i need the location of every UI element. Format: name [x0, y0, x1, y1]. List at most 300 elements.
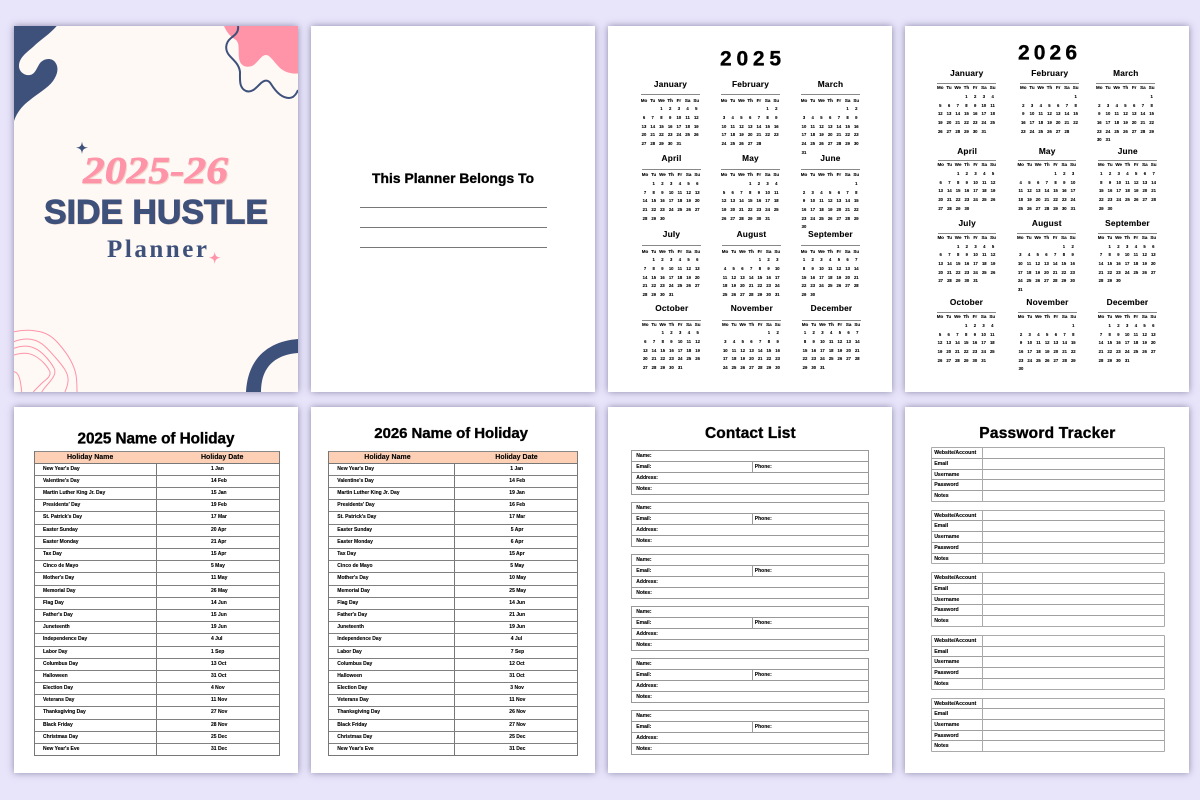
calendar: April 2025: 10 — [669, 190, 673, 195]
calendar: April 2026: Fr — [973, 162, 978, 167]
calendar: May 2026: Fr — [1053, 162, 1058, 167]
calendar: March 2025: 30 — [854, 141, 859, 146]
cover title: 2025-26: 2025-26 — [83, 151, 229, 193]
calendar: May 2026: 9 — [1063, 180, 1065, 185]
calendar: April 2026: 18 — [982, 188, 987, 193]
calendar: November 2026 — [1018, 297, 1077, 371]
calendar: June 2025: 13 — [837, 198, 841, 203]
table header: 2026: Holiday Name — [364, 454, 411, 461]
calendar: February 2026: 6 — [1057, 103, 1059, 108]
calendar: September 2026: 16 — [1116, 261, 1121, 266]
calendar: April 2026: 10 — [973, 180, 978, 185]
calendar: July 2026: 9 — [966, 252, 968, 257]
heading: 2026: 2026 — [1018, 42, 1077, 64]
calendar: May 2026: Th — [1044, 162, 1050, 167]
calendar: August 2026: 20 — [1044, 270, 1049, 275]
calendar: April 2026: 11 — [982, 180, 986, 185]
calendar: July 2025: 19 — [686, 275, 691, 280]
calendar: January 2026: 4 — [991, 94, 994, 99]
calendar: February 2025: 20 — [748, 132, 752, 137]
calendar: July 2025: We — [659, 249, 666, 254]
calendar: March 2025: 17 — [802, 132, 806, 137]
calendar: July 2026: 27 — [938, 278, 943, 283]
table: 2026 holidays: St. Patrick's Day — [337, 514, 376, 520]
calendar: March 2025: Su — [853, 98, 859, 103]
calendar: October 2026: 17 — [981, 340, 986, 345]
form: contact 4: Phone: — [755, 620, 772, 626]
calendar: January 2026: Sa — [981, 85, 987, 90]
calendar: September 2026: Sa — [1142, 235, 1147, 240]
calendar: September 2026: Th — [1124, 235, 1130, 240]
calendar: April 2026: 13 — [938, 188, 943, 193]
calendar: February 2026: 4 — [1040, 103, 1042, 108]
calendar: October 2025: 8 — [662, 339, 664, 344]
calendar: February 2026: 12 — [1047, 111, 1052, 116]
calendar: October 2026: 26 — [938, 358, 942, 363]
table: 2026 holidays: Easter Sunday — [337, 527, 372, 533]
calendar: February 2026: 28 — [1065, 129, 1069, 134]
calendar: October 2025: 6 — [644, 339, 646, 344]
calendar: October 2025: We — [659, 322, 666, 327]
calendar: December 2026: 31 — [1125, 358, 1129, 363]
calendar: November 2026: 21 — [1062, 349, 1067, 354]
calendar: August 2025: 12 — [731, 275, 736, 280]
calendar: October 2026: 24 — [981, 349, 986, 354]
calendar: May 2026: 17 — [1071, 188, 1075, 193]
calendar: August 2025: Su — [774, 249, 780, 254]
calendar: March 2026: Tu — [1105, 85, 1111, 90]
calendar: July 2026: 26 — [991, 270, 995, 275]
calendar: February 2026: 24 — [1030, 129, 1034, 134]
calendar: October 2026: 3 — [982, 323, 985, 328]
form: password entry 2: Email — [934, 523, 948, 529]
calendar: July 2025: 22 — [651, 283, 656, 288]
form: password entry 1 — [931, 447, 1165, 502]
calendar: September 2026: 21 — [1099, 270, 1103, 275]
table: 2026 holidays: New Year's Day — [337, 466, 374, 472]
calendar: January 2025: 14 — [650, 124, 655, 129]
calendar: December 2026: 8 — [1109, 332, 1111, 337]
calendar: March 2026: 16 — [1097, 120, 1102, 125]
calendar: August 2026: Su — [1070, 235, 1075, 240]
calendar: May 2025: 29 — [748, 216, 752, 221]
calendar: August 2025: 10 — [775, 266, 780, 271]
calendar: August 2026: 24 — [1018, 278, 1023, 283]
calendar: October 2025: 21 — [652, 356, 656, 361]
calendar: October 2026: 28 — [955, 358, 960, 363]
form: contact 1: Phone: — [755, 464, 772, 470]
calendar: August 2026: 6 — [1045, 252, 1048, 257]
calendar: April 2026: 23 — [964, 197, 969, 202]
icon: pink sparkle — [209, 252, 221, 264]
calendar: November 2026: 27 — [1054, 358, 1058, 363]
form: contact 6: Address: — [636, 735, 658, 741]
heading: 2025: 2025 — [720, 48, 781, 70]
calendar: May 2026: 31 — [1071, 206, 1075, 211]
calendar: March 2026: Fr — [1132, 85, 1136, 90]
calendar: July 2025: 4 — [679, 257, 681, 262]
calendar: September 2026: 30 — [1116, 278, 1121, 283]
calendar: April 2025: Tu — [651, 172, 656, 177]
table: 2026 holidays: 31 Dec — [509, 746, 525, 752]
form: contact 6 — [631, 710, 869, 755]
calendar: October 2025: 9 — [670, 339, 673, 344]
calendar: May 2025: 26 — [722, 216, 726, 221]
calendar: May 2026: 4 — [1020, 180, 1022, 185]
table: 2026 holidays: 25 Dec — [509, 734, 525, 740]
calendar: February 2025: 10 — [722, 124, 726, 129]
calendar: April 2025: Th — [668, 172, 674, 177]
calendar: January 2026: 11 — [990, 103, 995, 108]
calendar: April 2026: 28 — [947, 206, 952, 211]
calendar: November 2025: Th — [749, 322, 754, 327]
calendar: October 2026 — [937, 297, 996, 363]
calendar: December 2025: December — [811, 303, 852, 313]
calendar: September 2026: Fr — [1134, 235, 1138, 240]
calendar: September 2026: 14 — [1099, 261, 1103, 266]
calendar: August 2026: 16 — [1070, 261, 1075, 266]
calendar: January 2025: 17 — [677, 124, 681, 129]
calendar: January 2026: 13 — [947, 111, 951, 116]
calendar: April 2026: 15 — [956, 188, 960, 193]
calendar: September 2026: 9 — [1117, 252, 1120, 257]
calendar: August 2025: 15 — [758, 275, 762, 280]
panel: contact list page — [608, 407, 892, 773]
table: 2025 holidays: 1 Jan — [211, 466, 224, 472]
heading: Password Tracker: Password Tracker — [979, 425, 1115, 442]
calendar: July 2025: 5 — [687, 257, 690, 262]
calendar: August 2025: Mo — [722, 249, 728, 254]
table: 2026 holidays: New Year's Eve — [337, 746, 374, 752]
calendar: January 2026: 6 — [948, 103, 950, 108]
table: 2026 holidays: Columbus Day — [337, 661, 372, 667]
calendar: October 2025: Sa — [686, 322, 692, 327]
table: 2026 holidays: Father's Day — [337, 612, 367, 618]
calendar: October 2026: 27 — [946, 358, 951, 363]
calendar: April 2026: 5 — [992, 171, 994, 176]
calendar: June 2025: 16 — [802, 207, 806, 212]
calendar: January 2025: 30 — [668, 141, 672, 146]
calendar: August 2025: Fr — [758, 249, 762, 254]
heading: 2026 Name of Holiday: 2026 Name of Holiday — [374, 425, 529, 442]
calendar: February 2025: Th — [747, 98, 753, 103]
calendar: July 2026: 5 — [992, 244, 994, 249]
calendar: October 2026: Fr — [973, 314, 977, 319]
calendar: November 2026: 25 — [1036, 358, 1041, 363]
panel: password tracker page — [905, 407, 1189, 773]
calendar: September 2026: Su — [1150, 235, 1156, 240]
calendar: July 2025 — [642, 229, 701, 297]
calendar: May 2026: 19 — [1027, 197, 1032, 202]
calendar: September 2025: 14 — [854, 266, 859, 271]
calendar: December 2025: Su — [854, 322, 860, 327]
calendar: May 2025: 31 — [765, 216, 770, 221]
calendar: July 2025: Fr — [678, 249, 682, 254]
form: contact 5: Address: — [636, 683, 658, 689]
form: password entry 1: Password — [934, 482, 959, 488]
table: 2026 holidays: 5 Apr — [511, 527, 523, 533]
calendar: August 2025 — [722, 229, 781, 297]
calendar: July 2025: Mo — [642, 249, 648, 254]
calendar: July 2026: Tu — [947, 235, 952, 240]
calendar: March 2026: 23 — [1097, 129, 1102, 134]
calendar: January 2026: 16 — [973, 111, 978, 116]
calendar: January 2025: 26 — [694, 132, 699, 137]
calendar: April 2025: 2 — [661, 181, 664, 186]
calendar: October 2025: 12 — [695, 339, 700, 344]
calendar: September 2025: September — [808, 229, 853, 239]
calendar: November 2025: 21 — [758, 356, 762, 361]
calendar: August 2026: 29 — [1062, 278, 1066, 283]
calendar: April 2025: 1 — [653, 181, 655, 186]
calendar: January 2025: 21 — [650, 132, 655, 137]
table: 2025 holidays: 31 Oct — [211, 673, 226, 679]
calendar: May 2025: 3 — [766, 181, 769, 186]
calendar: January 2025 — [641, 79, 700, 146]
calendar: February 2026: Sa — [1064, 85, 1070, 90]
calendar: September 2026: 18 — [1134, 261, 1138, 266]
calendar: November 2025: 18 — [732, 356, 736, 361]
calendar: June 2025: 12 — [828, 198, 832, 203]
calendar: March 2025: Fr — [837, 98, 841, 103]
calendar: February 2025: 11 — [730, 124, 735, 129]
calendar: August 2025: 16 — [766, 275, 771, 280]
calendar: April 2026: 22 — [956, 197, 960, 202]
calendar: May 2025: 28 — [739, 216, 744, 221]
table: 2026 holidays: 14 Feb — [509, 478, 525, 484]
calendar: October 2026: Tu — [946, 314, 951, 319]
calendar: July 2025: Tu — [651, 249, 656, 254]
calendar: May 2025: 17 — [765, 198, 770, 203]
form: password entry 3: Website/Account — [934, 575, 976, 581]
calendar: October 2026: 15 — [964, 340, 968, 345]
calendar: September 2025: 30 — [810, 292, 815, 297]
calendar: March 2025: Th — [827, 98, 833, 103]
calendar: December 2026: 23 — [1116, 349, 1121, 354]
calendar: May 2025: 12 — [722, 198, 726, 203]
calendar: August 2026: Tu — [1026, 235, 1032, 240]
calendar: March 2025: 3 — [803, 115, 805, 120]
calendar: January 2025: 10 — [677, 115, 681, 120]
calendar: December 2026: Tu — [1107, 314, 1112, 319]
calendar: November 2026: 4 — [1037, 332, 1040, 337]
calendar: November 2025: 16 — [775, 348, 780, 353]
calendar: October 2026: 5 — [939, 332, 941, 337]
calendar: March 2026: We — [1113, 85, 1120, 90]
calendar: November 2025: 25 — [732, 365, 736, 370]
calendar: November 2026: 24 — [1027, 358, 1032, 363]
calendar: September 2026: Tu — [1107, 235, 1112, 240]
calendar: February 2026: 5 — [1048, 103, 1051, 108]
calendar: October 2026: 30 — [973, 358, 977, 363]
calendar: October 2025: October — [655, 303, 688, 313]
calendar: December 2025: 1 — [804, 330, 806, 335]
calendar: September 2026: 24 — [1125, 270, 1129, 275]
calendar: July 2026: 15 — [956, 261, 960, 266]
calendar: September 2026: 27 — [1151, 270, 1156, 275]
table: 2025 holidays: Independence Day — [43, 636, 87, 642]
calendar: October 2026: 4 — [991, 323, 993, 328]
calendar: August 2025: 13 — [740, 275, 745, 280]
table: 2026 holidays: 19 Jan — [509, 490, 525, 496]
calendar: June 2026: We — [1115, 162, 1122, 167]
calendar: March 2025: 19 — [819, 132, 824, 137]
form: password entry 1: Email — [934, 461, 948, 467]
form: password entry 2: Password — [934, 545, 959, 551]
form: password entry 5: Notes — [934, 743, 949, 749]
calendar: October 2026: 6 — [948, 332, 950, 337]
calendar: June 2026: 16 — [1108, 188, 1112, 193]
calendar: August 2026: 27 — [1044, 278, 1049, 283]
calendar: December 2025: Sa — [846, 322, 851, 327]
calendar: December 2026: 10 — [1125, 332, 1129, 337]
table header: 2026 — [329, 451, 577, 464]
calendar: April 2025: 11 — [678, 190, 682, 195]
calendar: September 2025: 18 — [828, 275, 832, 280]
calendar: March 2025: 16 — [854, 124, 859, 129]
calendar: March 2026: 30 — [1097, 137, 1102, 142]
form: contact 1: Email: — [636, 464, 651, 470]
calendar: March 2026: Mo — [1096, 85, 1103, 90]
form: contact 5: Email: — [636, 672, 651, 678]
calendar: May 2025: 22 — [748, 207, 752, 212]
calendar: November 2025: Su — [775, 322, 780, 327]
calendar: October 2025: 30 — [669, 365, 674, 370]
calendar: June 2026: 9 — [1109, 180, 1111, 185]
calendar: November 2025: Tu — [731, 322, 737, 327]
calendar: March 2025: 29 — [845, 141, 850, 146]
calendar: June 2026: Tu — [1107, 162, 1113, 167]
table: 2026 holidays: 26 Nov — [509, 709, 526, 715]
table: 2025 holidays: Tax Day — [43, 551, 62, 557]
calendar: August 2026: 31 — [1018, 287, 1023, 292]
calendar: August 2025: 21 — [749, 283, 753, 288]
panel: 2025 calendar page — [608, 26, 892, 392]
calendar: February 2026: 23 — [1021, 129, 1026, 134]
calendar: March 2026: 5 — [1124, 103, 1127, 108]
table: 2026 holidays: Independence Day — [337, 636, 381, 642]
calendar: August 2025: 4 — [724, 266, 726, 271]
calendar: May 2025: 13 — [730, 198, 735, 203]
calendar: February 2026: 10 — [1030, 111, 1034, 116]
calendar: January 2025: 5 — [695, 106, 697, 111]
calendar: April 2025: 9 — [661, 190, 664, 195]
calendar: July 2025: 24 — [669, 283, 673, 288]
calendar: November 2026: 10 — [1027, 340, 1032, 345]
calendar: April 2025: 29 — [651, 216, 656, 221]
form: contact 2: Notes: — [636, 538, 652, 544]
calendar: November 2026: Su — [1070, 314, 1076, 319]
calendar: March 2026: 2 — [1098, 103, 1100, 108]
calendar: November 2025: 27 — [749, 365, 754, 370]
calendar: January 2025: 7 — [652, 115, 654, 120]
calendar: October 2025: 25 — [687, 356, 691, 361]
calendar: December 2025: 5 — [839, 330, 841, 335]
calendar: May 2025: Fr — [757, 172, 761, 177]
form: contact 4: Notes: — [636, 642, 652, 648]
calendar: September 2026: 29 — [1107, 278, 1112, 283]
calendar: February 2026: Mo — [1020, 85, 1027, 90]
table: 2026 holidays: 4 Jul — [511, 636, 522, 642]
form: contact 1 — [631, 450, 869, 495]
calendar: August 2025: August — [737, 229, 766, 239]
calendar: November 2026: 7 — [1063, 332, 1066, 337]
form: contact 4: Address: — [636, 631, 658, 637]
calendar: May 2025: May — [742, 153, 759, 163]
calendar: September 2025: Fr — [837, 249, 841, 254]
calendar: February 2026: 8 — [1074, 103, 1077, 108]
calendar: October 2026: 23 — [973, 349, 977, 354]
calendar: June 2026: 17 — [1116, 188, 1121, 193]
calendar: November 2025: 14 — [758, 348, 762, 353]
calendar: June 2026: 25 — [1125, 197, 1130, 202]
calendar: June 2026: 10 — [1116, 180, 1121, 185]
table: 2026 holidays: 21 Jun — [509, 612, 525, 618]
calendar: April 2026: 7 — [948, 180, 951, 185]
calendar: November 2025: 30 — [775, 365, 780, 370]
calendar: December 2026: We — [1115, 314, 1122, 319]
calendar: December 2025: 10 — [820, 339, 825, 344]
calendar: August 2025: 18 — [723, 283, 727, 288]
calendar: November 2026: 9 — [1020, 340, 1022, 345]
form: contact 5: Phone: — [755, 672, 772, 678]
calendar: March 2025: March — [818, 79, 843, 89]
calendar: January 2025: 27 — [642, 141, 646, 146]
calendar: January 2026: 5 — [939, 103, 941, 108]
calendar: July 2025: 15 — [651, 275, 656, 280]
calendar: July 2025: July — [663, 229, 680, 239]
calendar: December 2025: 31 — [820, 365, 825, 370]
calendar: August 2025: 7 — [750, 266, 752, 271]
calendar: November 2025: 11 — [732, 348, 736, 353]
calendar: December 2026: 7 — [1100, 332, 1102, 337]
calendar: September 2026: 10 — [1125, 252, 1129, 257]
calendar: March 2026: 12 — [1123, 111, 1128, 116]
calendar: August 2026: We — [1034, 235, 1041, 240]
calendar: March 2026: 3 — [1107, 103, 1109, 108]
calendar: November 2025: 28 — [758, 365, 762, 370]
calendar: February 2025: 24 — [722, 141, 726, 146]
table: 2026 holidays: Flag Day — [337, 600, 358, 606]
calendar: December 2025: 30 — [811, 365, 816, 370]
calendar: January 2025: Mo — [641, 98, 647, 103]
calendar: May 2025: 9 — [758, 190, 760, 195]
calendar: November 2025: 1 — [768, 330, 770, 335]
calendar: February 2026 — [1020, 68, 1079, 134]
panel: planner cover — [14, 26, 298, 392]
calendar: May 2026: 8 — [1054, 180, 1057, 185]
calendar: August 2026: Th — [1044, 235, 1049, 240]
form: password entry 4: Website/Account — [934, 638, 976, 644]
calendar: November 2025: 26 — [740, 365, 745, 370]
calendar: November 2025: 17 — [723, 356, 728, 361]
calendar: August 2026: 12 — [1035, 261, 1040, 266]
calendar: May 2025: 15 — [748, 198, 752, 203]
calendar: December 2026: 12 — [1142, 332, 1147, 337]
calendar: April 2026: 17 — [973, 188, 978, 193]
calendar: September 2026: 8 — [1109, 252, 1111, 257]
calendar: June 2025: 25 — [819, 216, 824, 221]
calendar: February 2025: 4 — [732, 115, 734, 120]
calendar: February 2025: February — [732, 79, 769, 89]
table: 2025 holidays: 15 Jun — [211, 612, 227, 618]
calendar: January 2026: 18 — [990, 111, 995, 116]
calendar: April 2026: 16 — [964, 188, 969, 193]
calendar: July 2026: 31 — [973, 278, 978, 283]
calendar: October 2025: 13 — [643, 348, 648, 353]
calendar: January 2025: 4 — [686, 106, 689, 111]
calendar: June 2025: Sa — [845, 172, 850, 177]
